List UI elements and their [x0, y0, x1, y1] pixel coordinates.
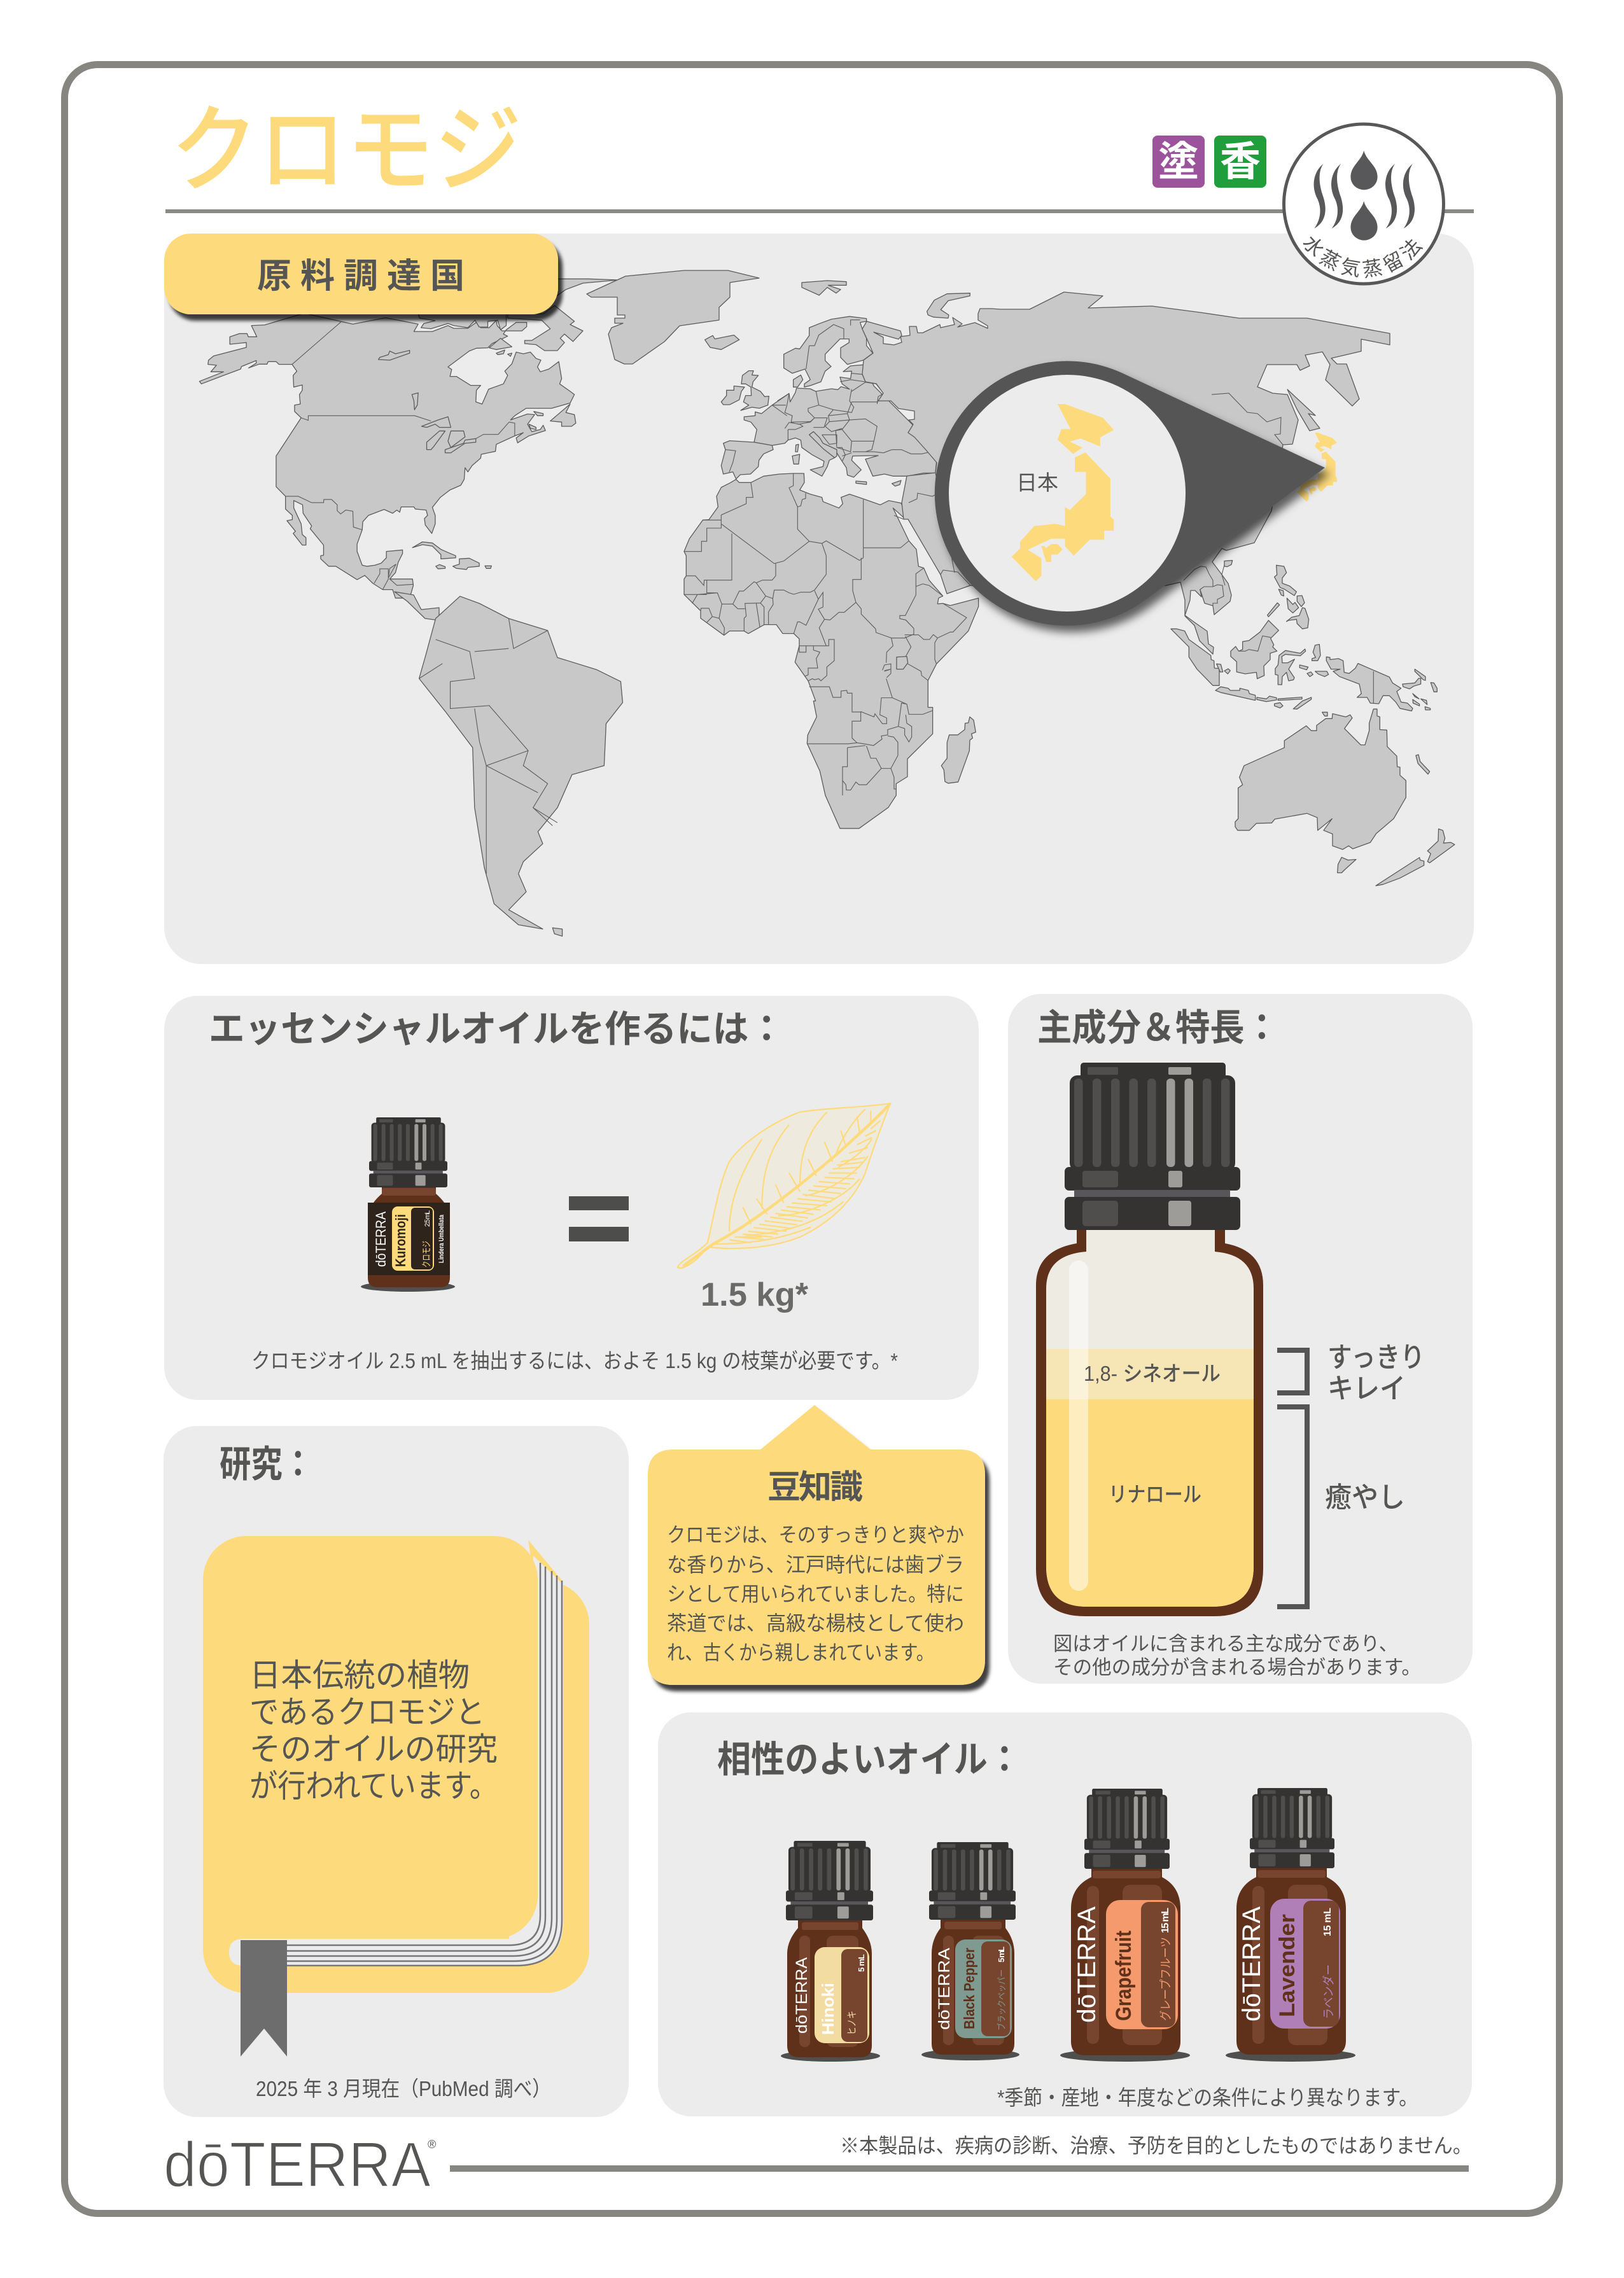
- book text: が行われています。: [249, 1768, 498, 1804]
- empty glass: [1046, 1225, 1254, 1607]
- bottle: lavender: 15 mL: [1322, 1908, 1333, 1936]
- bottle: hinoki: 5 mL: [857, 1954, 866, 1972]
- glass highlight: [1069, 1261, 1088, 1591]
- callout title: 豆知識: [767, 1469, 863, 1506]
- effect: refreshing: キレイ: [1327, 1373, 1406, 1404]
- callout text: 茶道では、高級な楊枝として使わ: [667, 1612, 964, 1635]
- label: 1,8-cineole: 1,8- シネオール: [1084, 1362, 1221, 1385]
- book: [203, 1536, 589, 2057]
- label: linalool: リナロール: [1109, 1483, 1201, 1506]
- yellow label: [392, 1206, 434, 1271]
- effect: refreshing: すっきり: [1327, 1342, 1425, 1373]
- footer rule: [450, 2165, 1469, 2172]
- bottle: lavender: dōTERRA: [1238, 1906, 1266, 2022]
- usage badge: topical: 塗: [1158, 139, 1199, 185]
- central america link: [395, 592, 439, 620]
- bottle: lavender: ラベンダー: [1322, 1964, 1336, 2019]
- callout shape: [648, 1405, 985, 1685]
- caption: クロモジオイル 2.5 mL を抽出するには、およそ 1.5 kg の枝葉が必要です。*: [251, 1349, 898, 1373]
- note: 図はオイルに含まれる主な成分であり、: [1053, 1633, 1398, 1655]
- quantity: 1.5 kg*: [701, 1276, 809, 1313]
- book text: であるクロモジと: [249, 1695, 485, 1730]
- bottle: grapefruit: [1060, 1789, 1190, 2062]
- note: [1053, 1633, 1421, 1679]
- sliver: [528, 1540, 563, 1584]
- bracket: relaxing: [1277, 1407, 1307, 1607]
- bottle: lavender: Lavender: [1275, 1914, 1299, 2017]
- bottle: black pepper: 5 mL: [997, 1946, 1006, 1962]
- callout text: [667, 1523, 964, 1664]
- panel: blends well with: [658, 1712, 1472, 2116]
- pages: [229, 1556, 563, 1966]
- book text: [249, 1658, 498, 1804]
- equals sign: [569, 1196, 629, 1241]
- bottle: hinoki: Hinoki: [818, 1983, 837, 2035]
- label band: [368, 1203, 450, 1275]
- europe: [705, 281, 970, 486]
- bottle: hinoki: [781, 1841, 880, 2062]
- label inner: [411, 1208, 433, 1269]
- callout text: クロモジは、そのすっきりと爽やか: [667, 1523, 964, 1546]
- panel background: [164, 996, 979, 1400]
- book text: 日本伝統の植物: [249, 1658, 470, 1693]
- panel: sourcing map: [164, 234, 1474, 964]
- bottle cap: [369, 1117, 447, 1187]
- callout: trivia: [648, 1405, 985, 1685]
- title: クロモジ: [171, 97, 522, 204]
- label: japan: 日本: [1016, 471, 1058, 494]
- scandinavia: [784, 316, 873, 387]
- back cover: [203, 1581, 589, 1993]
- madagascar: [941, 717, 976, 783]
- world map: [199, 270, 1455, 936]
- bottle body: [368, 1187, 450, 1287]
- bottle: grapefruit: 15 mL: [1160, 1908, 1171, 1933]
- bottle: black pepper: dōTERRA: [935, 1948, 953, 2030]
- icon: steam distillation: [1282, 122, 1445, 285]
- disclaimer: ※本製品は、疾病の診断、治療、予防を目的としたものではありません。: [840, 2134, 1472, 2157]
- callout text: な香りから、江戸時代には歯ブラ: [667, 1553, 964, 1576]
- bottle: hinoki: dōTERRA: [793, 1957, 811, 2034]
- southeast asia and oceania: [1171, 561, 1455, 886]
- asia: [862, 292, 1390, 654]
- neck highlight: [382, 1188, 436, 1196]
- usage badge: topical: [1152, 136, 1205, 188]
- bottle: lavender: [1226, 1788, 1355, 2062]
- panel: how to make the oil: [164, 996, 979, 1400]
- panel: main constituents: [1008, 994, 1473, 1684]
- band: cineole: [1046, 1349, 1254, 1399]
- book text: そのオイルの研究: [249, 1731, 498, 1767]
- panel background: [1008, 994, 1473, 1684]
- panel: research: [164, 1426, 629, 2117]
- logo: doterra: ®: [428, 2138, 436, 2151]
- magnifier body: [935, 361, 1325, 625]
- footnote: *季節・産地・年度などの条件により異なります。: [997, 2086, 1418, 2109]
- oil: linalool: [1046, 1399, 1254, 1607]
- icon: leaf: [678, 1103, 890, 1268]
- caption: 2025 年 3 月現在（PubMed 調べ）: [256, 2077, 551, 2100]
- japan on map: [1297, 433, 1337, 501]
- magnifier: [935, 361, 1325, 625]
- heading: 相性のよいオイル：: [717, 1739, 1021, 1780]
- front cover: [203, 1536, 538, 1939]
- bottle: black pepper: [921, 1842, 1019, 2060]
- heading pill: sourcing: 原料調達国: [257, 257, 465, 295]
- bottle: grapefruit: dōTERRA: [1073, 1906, 1101, 2023]
- constituent bottle: [1036, 1063, 1263, 1616]
- header rule: [165, 209, 1474, 213]
- name: Kuromoji: [393, 1214, 409, 1267]
- bottle: grapefruit: グレープフルーツ: [1159, 1937, 1173, 2021]
- cap: [1065, 1063, 1240, 1230]
- effect: relaxing: 癒やし: [1325, 1482, 1405, 1513]
- doterra mark: dōTERRA: [373, 1212, 389, 1267]
- page edge lines: [287, 1563, 562, 1966]
- heading: 研究：: [220, 1444, 314, 1485]
- name jp: クロモジ: [421, 1241, 432, 1268]
- africa: [684, 473, 979, 828]
- logo: doterra: dōTERRA: [164, 2129, 431, 2200]
- bottle shadow: [361, 1282, 455, 1292]
- bottle: kuromoji: [361, 1117, 455, 1292]
- heading: エッセンシャルオイルを作るには：: [209, 1009, 785, 1050]
- icon: steam distillation: 水蒸気蒸留法: [1303, 237, 1423, 279]
- heading: 主成分＆特長：: [1037, 1007, 1279, 1049]
- magnifier lens: [949, 375, 1186, 611]
- latin name: Lindera Umbellata: [438, 1214, 445, 1263]
- bottle: hinoki: ヒノキ: [847, 2011, 858, 2035]
- volume: 2.5 mL: [424, 1210, 431, 1227]
- bookmark: [241, 1940, 287, 2057]
- bottle: grapefruit: Grapefruit: [1112, 1931, 1136, 2021]
- south america: [419, 596, 622, 936]
- usage badge: aromatic: 香: [1220, 139, 1261, 185]
- bottle outline: [1036, 1225, 1263, 1616]
- north america: [199, 279, 619, 598]
- heading pill: sourcing: [164, 234, 558, 314]
- bottle: black pepper: ブラックペッパー: [997, 1969, 1007, 2030]
- map panel background: [164, 234, 1474, 964]
- note: その他の成分が含まれる場合があります。: [1053, 1656, 1421, 1679]
- greenland: [587, 270, 759, 364]
- panel background: [164, 1426, 629, 2117]
- japan enlarged: [1012, 404, 1114, 581]
- callout text: れ、古くから親しまれています。: [667, 1641, 934, 1664]
- usage badge: aromatic: [1214, 136, 1266, 188]
- effect: refreshing: [1327, 1342, 1425, 1404]
- panel background: [658, 1712, 1472, 2116]
- bracket: refreshing: [1277, 1350, 1307, 1393]
- callout text: シとして用いられていました。特に: [667, 1583, 964, 1605]
- bottle: black pepper: Black Pepper: [961, 1948, 977, 2029]
